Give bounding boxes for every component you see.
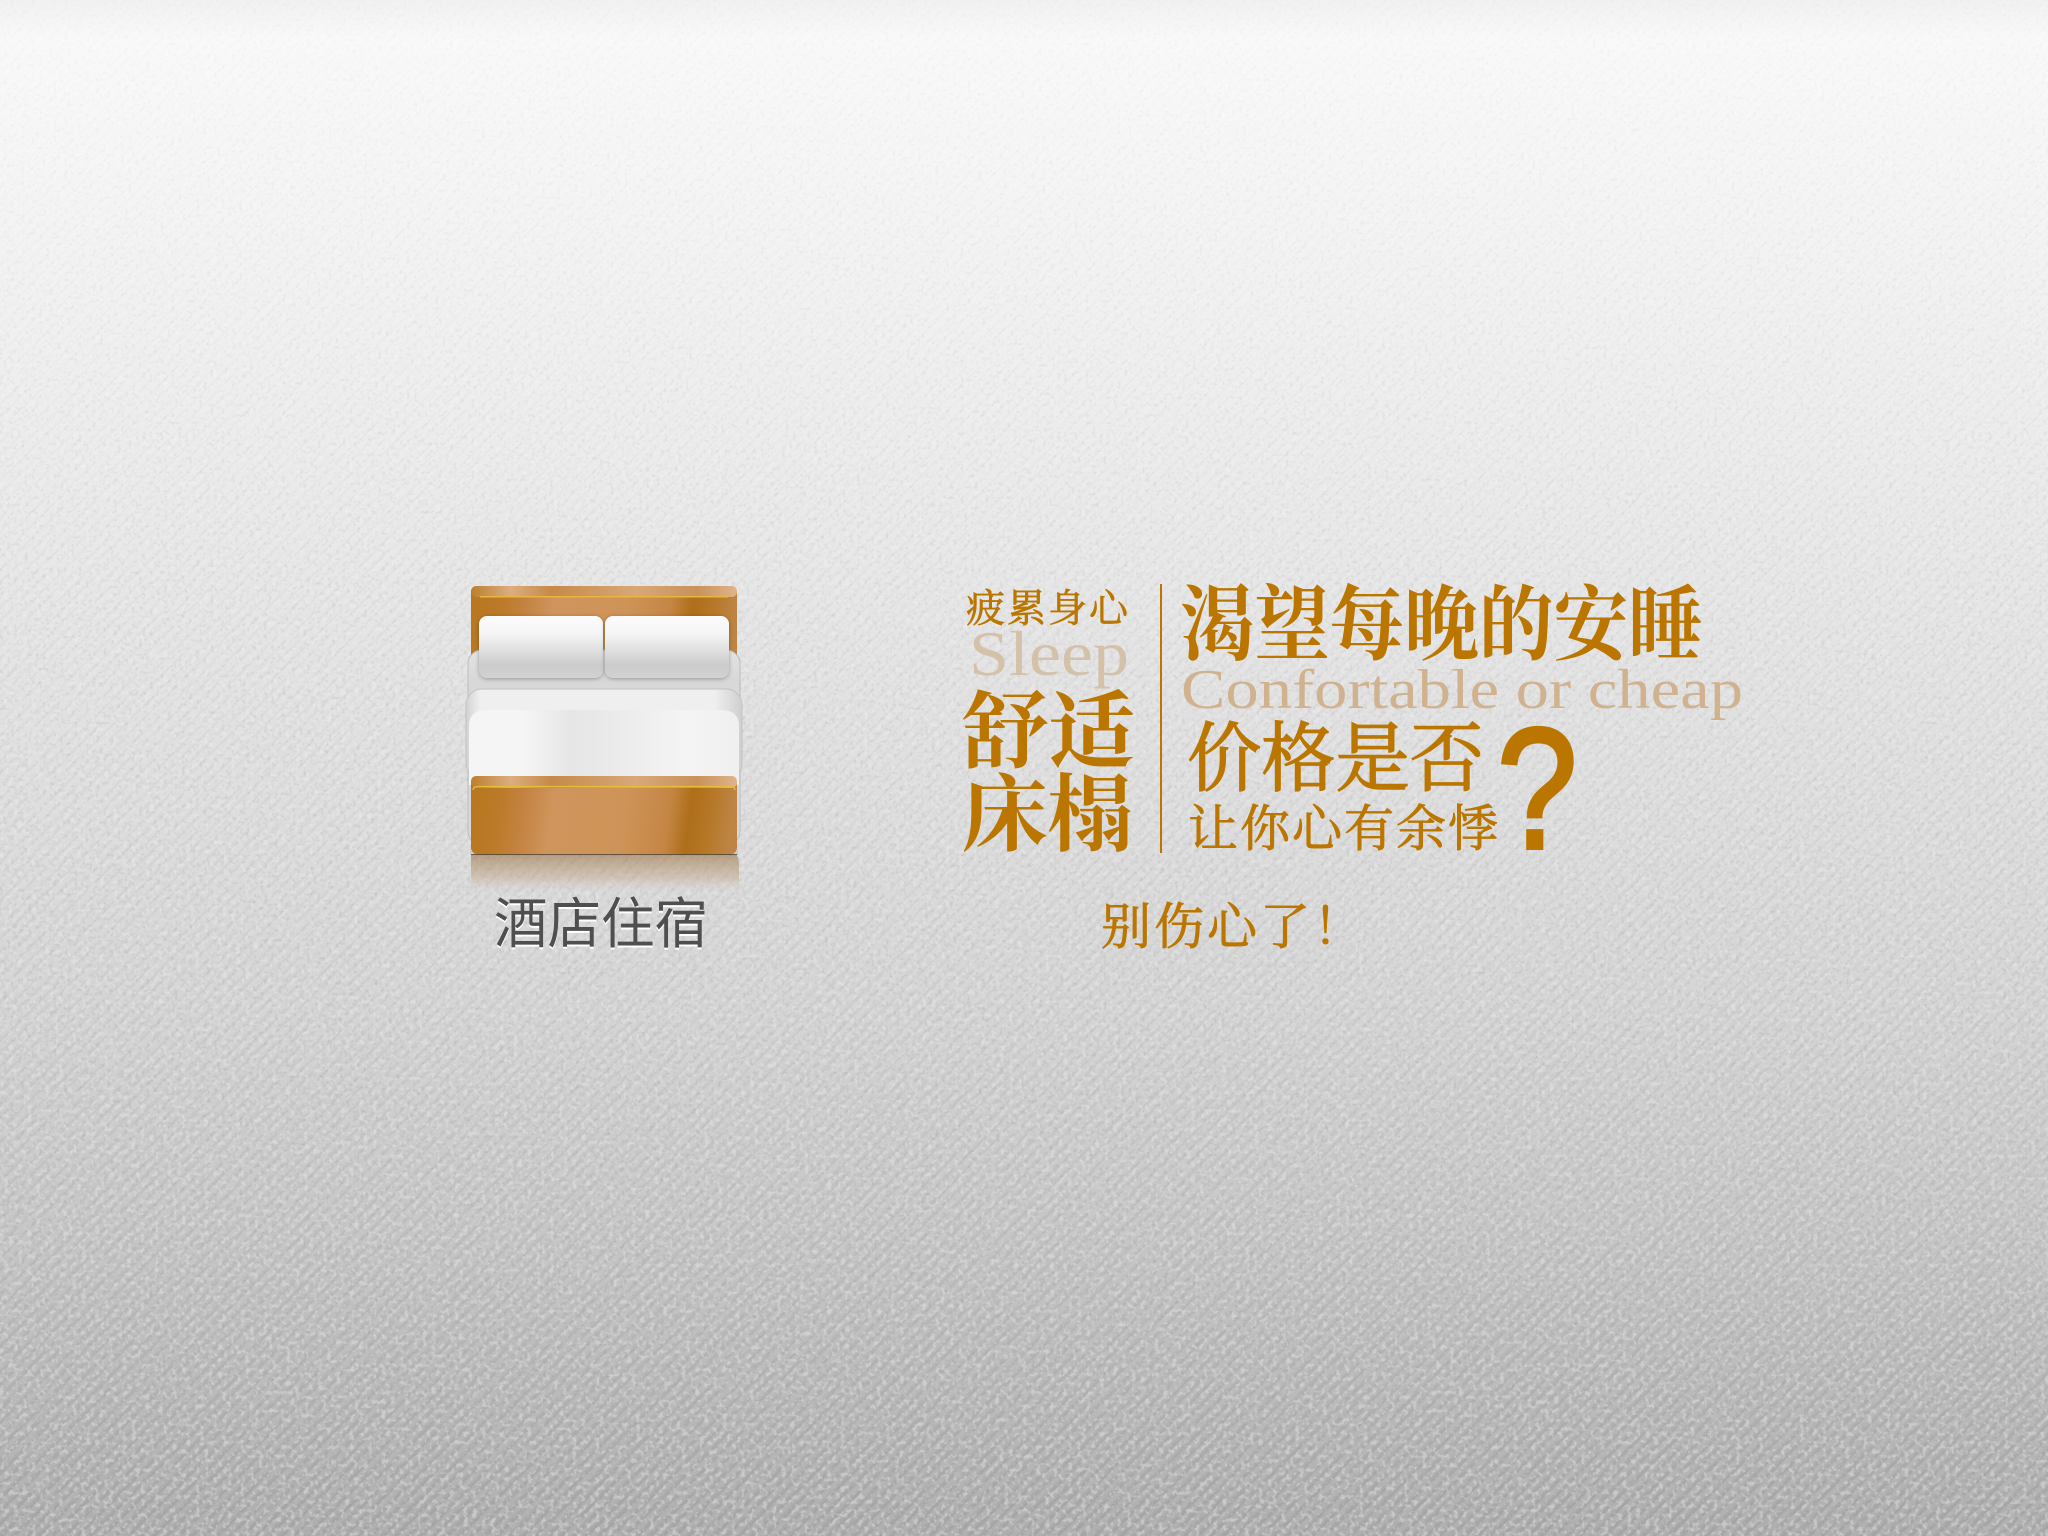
left pillow — [479, 616, 603, 678]
bed reflection — [471, 856, 739, 894]
headboard — [471, 586, 737, 670]
text: Sleep: Sleep — [969, 618, 1129, 689]
icon caption: 酒店住宿 — [494, 893, 708, 955]
right pillow — [605, 616, 729, 678]
blanket fold — [466, 689, 742, 779]
text block: left column — [962, 588, 1135, 863]
footboard — [470, 776, 738, 856]
closing text: 别伤心了！ — [1101, 899, 1363, 955]
icon caption: 酒店住宿 — [494, 895, 708, 957]
text: tired body and mind: 疲累身心 — [966, 588, 1130, 631]
icon: hotel bed — [466, 586, 742, 894]
text: bed: 床榻 — [962, 770, 1133, 863]
text: Confortable or cheap: Confortable or cheap — [1181, 659, 1743, 721]
big question mark: ? — [1497, 692, 1577, 885]
divider line — [1160, 584, 1162, 853]
text: is the price: 价格是否 — [1187, 718, 1484, 802]
text block: right column — [1180, 580, 1743, 857]
mattress — [468, 650, 740, 845]
text: comfortable: 舒适 — [962, 687, 1135, 780]
blanket — [469, 710, 739, 785]
headline: 渴望每晚的安睡 — [1180, 580, 1703, 671]
text: leaves you worried: 让你心有余悸 — [1188, 801, 1498, 857]
